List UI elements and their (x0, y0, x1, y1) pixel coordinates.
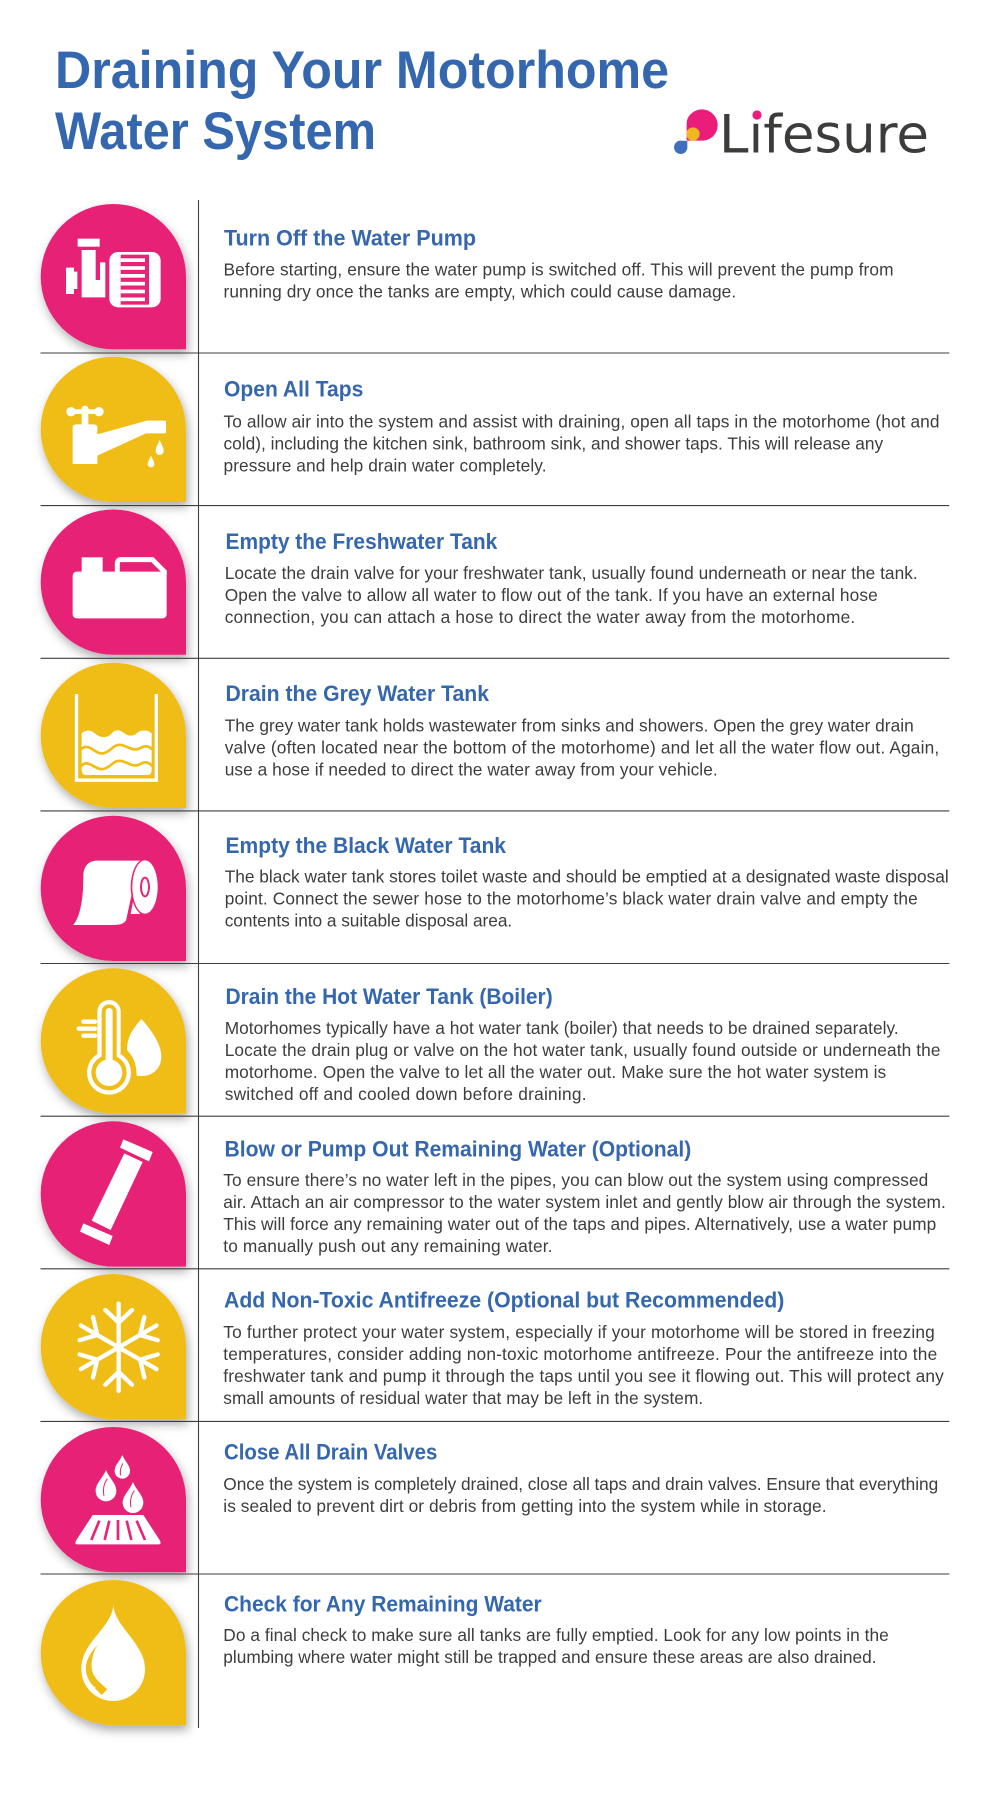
icon: water pump (41, 204, 186, 349)
text block: To further protect your water system, especially if your motorhome will be stored in freezing (223, 1322, 935, 1342)
title (55, 41, 669, 161)
heading: Blow or Pump Out Remaining Water (Optional) (224, 1137, 691, 1162)
text block: switched off and cooled down before draining. (225, 1084, 586, 1104)
text block: To allow air into the system and assist with draining, open all taps in the motorhome (hot and (224, 411, 940, 431)
title: Draining Your Motorhome (55, 41, 669, 100)
icon: toilet roll (41, 816, 186, 961)
text block: This will force any remaining water out of the taps and pipes. Alternatively, use a water pump (223, 1214, 936, 1234)
title: Water System (55, 102, 376, 161)
text block: small amounts of residual water that may be left in the system. (223, 1388, 703, 1408)
panel: step 1 turn off the water pump (41, 204, 893, 349)
panel: step 9 close all drain valves (41, 1427, 938, 1572)
heading: Turn Off the Water Pump (224, 226, 476, 251)
text block (225, 1018, 940, 1104)
text block: to manually push out any remaining water. (223, 1236, 553, 1256)
text block: point. Connect the sewer hose to the motorhome’s black water drain valve and empty the (225, 888, 918, 908)
text block: motorhome. Open the valve to let all the water out. Make sure the hot water system is (225, 1062, 887, 1082)
text block: Before starting, ensure the water pump is switched off. This will prevent the pump from (224, 259, 894, 279)
panel: step 2 open all taps (41, 357, 939, 502)
heading: Close All Drain Valves (224, 1439, 437, 1464)
heading: Empty the Freshwater Tank (226, 529, 498, 554)
text block: connection, you can attach a hose to direct the water away from the motorhome. (225, 607, 855, 627)
text block: Open the valve to allow all water to flow out of the tank. If you have an external hose (225, 585, 878, 605)
text block (224, 259, 894, 301)
text block (225, 866, 949, 930)
icon: dripping tap (41, 357, 186, 502)
text block: is sealed to prevent dirt or debris from getting into the system while in storage. (223, 1496, 827, 1516)
text block (223, 1474, 938, 1516)
heading: Drain the Grey Water Tank (226, 681, 489, 706)
heading: Add Non-Toxic Antifreeze (Optional but Recommended) (224, 1288, 784, 1313)
icon: water drop (41, 1580, 186, 1725)
panel: step 6 drain the hot water tank (41, 968, 940, 1114)
icon: jerry can (41, 510, 186, 655)
text block: temperatures, consider adding non-toxic motorhome antifreeze. Pour the antifreeze into the (223, 1344, 937, 1364)
icon: drops over drain grate (41, 1427, 186, 1572)
text block: use a hose if needed to direct the water away from your vehicle. (225, 760, 718, 780)
text block: To ensure there’s no water left in the pipes, you can blow out the system using compressed (223, 1170, 928, 1190)
text block (223, 1322, 944, 1408)
text block: The black water tank stores toilet waste and should be emptied at a designated waste disposal (225, 866, 949, 886)
text block: running dry once the tanks are empty, which could cause damage. (224, 281, 736, 301)
text block: contents into a suitable disposal area. (225, 910, 512, 930)
heading: Empty the Black Water Tank (226, 833, 506, 858)
icon: pipe (41, 1121, 186, 1267)
text block: pressure and help drain water completely. (224, 455, 546, 475)
panel: step 3 empty the freshwater tank (41, 510, 918, 655)
icon: snowflake (41, 1274, 186, 1419)
panel: step 8 add non-toxic antifreeze (41, 1274, 944, 1419)
icon: tank with water (41, 663, 186, 808)
panel: step 7 blow or pump out remaining water (41, 1121, 946, 1267)
text block: Motorhomes typically have a hot water tank (boiler) that needs to be drained separately. (225, 1018, 899, 1038)
heading: Open All Taps (224, 377, 363, 402)
text block (225, 715, 939, 780)
text block: cold), including the kitchen sink, bathroom sink, and shower taps. This will release any (224, 433, 884, 453)
text block (223, 1170, 946, 1256)
text block: The grey water tank holds wastewater from sinks and showers. Open the grey water drain (225, 715, 914, 735)
icon: thermometer and drop (41, 968, 186, 1114)
text block: plumbing where water might still be trapped and ensure these areas are also drained. (223, 1647, 877, 1667)
panel: step 4 drain the grey water tank (41, 663, 939, 808)
panel: step 10 check for any remaining water (41, 1580, 889, 1725)
text block (224, 411, 940, 475)
text block: Once the system is completely drained, close all taps and drain valves. Ensure that everything (223, 1474, 938, 1494)
panel: step 5 empty the black water tank (41, 816, 949, 961)
text block: Do a final check to make sure all tanks are fully emptied. Look for any low points in the (223, 1625, 889, 1645)
text block: Locate the drain plug or valve on the hot water tank, usually found outside or underneath the (225, 1040, 940, 1060)
heading: Drain the Hot Water Tank (Boiler) (226, 984, 553, 1009)
text block: air. Attach an air compressor to the water system inlet and gently blow air through the system. (223, 1192, 946, 1212)
text block (223, 1625, 889, 1667)
heading: Check for Any Remaining Water (224, 1592, 542, 1617)
logo: Lifesure: Lifesure (719, 104, 929, 165)
text block: freshwater tank and pump it through the taps until you see it flowing out. This will protect any (223, 1366, 944, 1386)
text block: Locate the drain valve for your freshwater tank, usually found underneath or near the tank. (225, 563, 918, 583)
text block (225, 563, 918, 627)
text block: valve (often located near the bottom of the motorhome) and let all the water flow out. Again, (225, 738, 939, 758)
